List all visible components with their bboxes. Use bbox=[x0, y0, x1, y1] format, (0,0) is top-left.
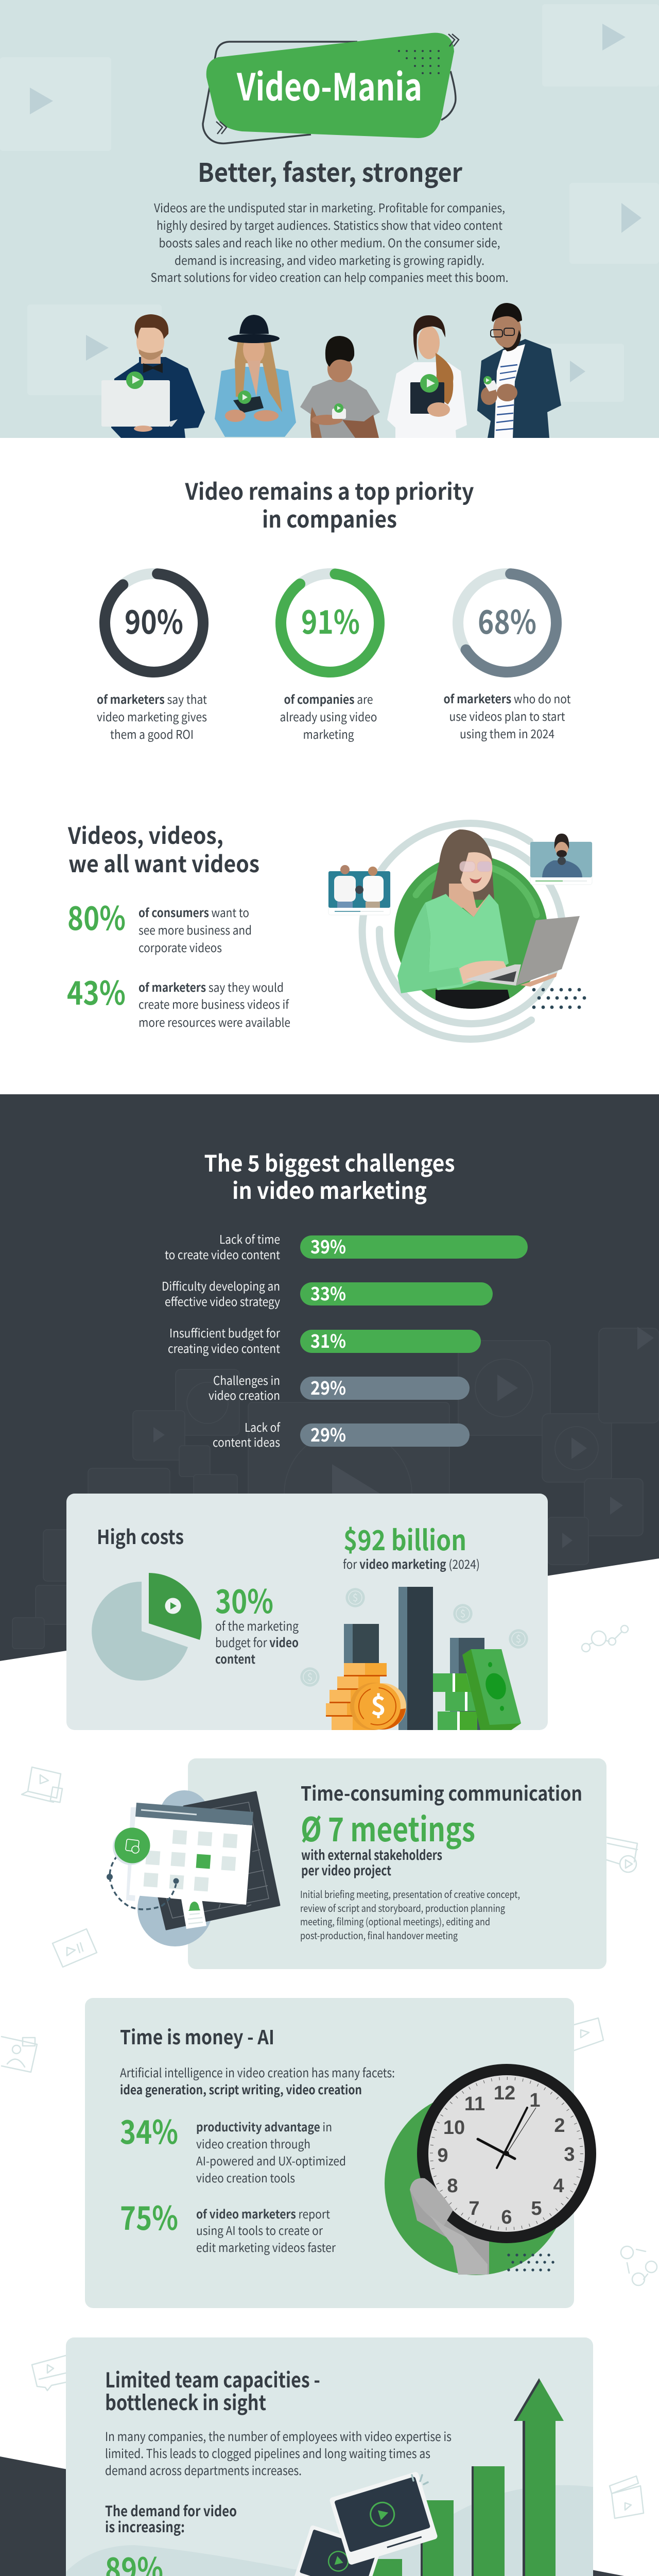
stat: 80%: see more business and bbox=[138, 921, 252, 938]
intro text: highly desired by target audiences. Statistics show that video content bbox=[157, 216, 502, 233]
stat: 43%: of marketers say they would bbox=[138, 978, 284, 995]
bar 29% ideas: Lack of bbox=[245, 1418, 281, 1435]
caption: 68%: of marketers who do not bbox=[444, 689, 571, 707]
icon: clapperboard bbox=[610, 2476, 644, 2518]
caption: 91%: of companies are bbox=[284, 690, 373, 707]
icon: video frame bbox=[574, 2018, 603, 2050]
stat: 80%: 80% bbox=[67, 893, 126, 940]
stat: 43%: 43% bbox=[67, 968, 126, 1014]
heading: top priority bbox=[185, 473, 474, 534]
stat: 30%: 30% bbox=[215, 1576, 273, 1623]
illustration: clock with hand: 8 bbox=[447, 2175, 458, 2197]
heading: top priority: in companies bbox=[262, 501, 397, 534]
intro text: Smart solutions for video creation can help companies meet this boom. bbox=[150, 268, 509, 285]
panel: time-consuming communication bbox=[107, 1758, 606, 1969]
icon: cycle bbox=[621, 2246, 657, 2285]
caption: 90%: video marketing gives bbox=[97, 707, 207, 725]
heading: challenges: in video marketing bbox=[232, 1173, 427, 1206]
heading: videos: Videos, videos, bbox=[67, 818, 223, 851]
stat: 92 billion: for video marketing (2024) bbox=[343, 1554, 480, 1572]
text: meeting list: Initial briefing meeting, presentation of creative concept, bbox=[300, 1887, 520, 1901]
icon: dollar tokens: $ bbox=[516, 1632, 521, 1646]
bar 31%: creating video content bbox=[168, 1339, 280, 1357]
illustration: bars, coins, cash bbox=[326, 1587, 521, 1730]
video card: small bbox=[255, 2569, 330, 2576]
bar 33%: effective video strategy bbox=[165, 1292, 280, 1310]
caption: 68%: use videos plan to start bbox=[449, 707, 565, 724]
heading: time is money: Time is money - AI bbox=[120, 2022, 274, 2050]
person: woman with tablet bbox=[387, 315, 467, 438]
stat: 80%: of consumers want to bbox=[138, 903, 249, 921]
heading: challenges bbox=[204, 1145, 455, 1206]
illustration: clock with hand: 12 bbox=[494, 2082, 515, 2104]
icon: presenter bbox=[2, 2037, 37, 2072]
caption: 90%: of marketers say that bbox=[97, 690, 207, 707]
bar 33%: 33% bbox=[310, 1279, 346, 1306]
intro text: Videos are the undisputed star in marketing. Profitable for companies, bbox=[154, 198, 505, 216]
donut chart: 91% bbox=[276, 569, 384, 677]
stat: 75% bbox=[120, 2193, 336, 2256]
stat: 43%: more resources were available bbox=[138, 1013, 290, 1030]
stat: 75%: of video marketers report bbox=[196, 2205, 330, 2222]
subtitle: Better, faster, stronger bbox=[198, 152, 462, 190]
illustration: clock with hand: 1 bbox=[529, 2090, 541, 2111]
icon: dollar tokens: $ bbox=[307, 1670, 313, 1684]
caption: 68% bbox=[444, 689, 571, 742]
stat: 30%: content bbox=[215, 1649, 255, 1667]
stat: 75%: edit marketing videos faster bbox=[196, 2238, 336, 2256]
title: Video-Mania bbox=[236, 57, 422, 111]
donut chart: 68%: 68% bbox=[478, 597, 536, 643]
text: AI intro: idea generation, script writing, video creation bbox=[120, 2080, 362, 2098]
illustration: calendar bbox=[107, 1790, 280, 1946]
panel: time is money bbox=[85, 1998, 596, 2308]
bar 39%: Lack of time bbox=[219, 1230, 280, 1247]
illustration: clock with hand: 4 bbox=[553, 2175, 564, 2197]
donut chart: 90% bbox=[101, 570, 206, 675]
illustration: woman with laptop bbox=[328, 823, 592, 1039]
icon: calendar play bbox=[606, 1837, 637, 1872]
heading: limited team bbox=[105, 2364, 320, 2416]
stat: 34%: AI-powered and UX-optimized bbox=[196, 2151, 346, 2169]
text: AI intro bbox=[120, 2063, 395, 2098]
text: meeting list: review of script and storyboard, production planning bbox=[300, 1901, 505, 1915]
illustration: clock with hand: 5 bbox=[531, 2198, 542, 2219]
stat: 7 meetings: Ø 7 meetings bbox=[301, 1804, 475, 1851]
text: meeting list bbox=[300, 1887, 520, 1942]
caption: 91%: already using video bbox=[280, 707, 377, 725]
heading: top priority: Video remains a top priority bbox=[185, 473, 474, 506]
text: meeting list: post-production, final handover meeting bbox=[300, 1928, 458, 1942]
intro text bbox=[150, 198, 509, 285]
illustration: clock with hand: 6 bbox=[501, 2207, 512, 2228]
caption: 91% bbox=[280, 690, 377, 742]
illustration: bars, coins, cash: $ bbox=[371, 1686, 386, 1723]
heading: limited team: bottleneck in sight bbox=[105, 2386, 266, 2416]
caption: 90% bbox=[97, 690, 207, 742]
subheading: demand bbox=[105, 2500, 237, 2537]
stat: 7 meetings bbox=[301, 1804, 475, 1879]
person: man in blazer bbox=[477, 303, 561, 438]
bar 33% bbox=[162, 1277, 493, 1310]
bar 31%: 31% bbox=[310, 1327, 346, 1353]
badge chevrons bbox=[216, 34, 459, 134]
person: man with laptop bbox=[101, 314, 205, 438]
stat: 80% bbox=[67, 893, 252, 956]
stat: 80%: corporate videos bbox=[138, 938, 222, 956]
icon: laptop play bbox=[22, 1767, 62, 1802]
stat: 34%: productivity advantage in bbox=[196, 2117, 332, 2135]
caption: 68%: using them in 2024 bbox=[460, 724, 554, 742]
video card: large bbox=[329, 2471, 438, 2565]
chart: growth bars with arrow bbox=[267, 2378, 564, 2576]
panel: hero bbox=[0, 0, 659, 438]
text: AI intro: Artificial intelligence in video creation has many facets: bbox=[120, 2063, 395, 2081]
heading: videos bbox=[67, 818, 259, 879]
stat: 43%: create more business videos if bbox=[138, 995, 289, 1012]
bar 39%: to create video content bbox=[165, 1245, 280, 1263]
heading: high costs: High costs bbox=[97, 1521, 184, 1550]
heading: limited team: Limited team capacities - bbox=[105, 2364, 320, 2394]
stat: 34% bbox=[120, 2107, 346, 2186]
stat: 30%: of the marketing bbox=[215, 1616, 299, 1634]
panel: high costs bbox=[66, 1494, 548, 1730]
stat: 34%: 34% bbox=[120, 2107, 178, 2154]
text: limited team: In many companies, the number of employees with video expertise is bbox=[105, 2427, 452, 2445]
bar 29% creation: 29% bbox=[310, 1374, 346, 1400]
icon: dollar tokens bbox=[300, 1588, 528, 1687]
stat: 75%: 75% bbox=[120, 2193, 178, 2240]
illustration: clock with hand bbox=[385, 2064, 596, 2275]
illustration: clock with hand: 3 bbox=[564, 2144, 575, 2165]
illustration: clock with hand: 7 bbox=[469, 2198, 480, 2219]
icon: dollar tokens: $ bbox=[460, 1606, 465, 1620]
bar 31% bbox=[168, 1324, 481, 1357]
heading: communication: Time-consuming communication bbox=[301, 1778, 582, 1806]
stat: 7 meetings: with external stakeholders bbox=[301, 1845, 442, 1864]
stat: 30% bbox=[215, 1576, 299, 1667]
stat: 34%: video creation through bbox=[196, 2134, 310, 2152]
intro text: boosts sales and reach like no other medium. On the consumer side, bbox=[159, 233, 500, 251]
panel: challenges dark background bbox=[0, 1094, 659, 1661]
pie chart bbox=[92, 1573, 202, 1681]
heading: videos: we all want videos bbox=[68, 846, 259, 879]
accents bbox=[250, 2475, 428, 2576]
person: woman in grey sweater bbox=[300, 336, 380, 438]
icon: video card bbox=[53, 1929, 97, 1967]
text: limited team: demand across departments increases. bbox=[105, 2461, 302, 2479]
illustration: clock with hand: 10 bbox=[443, 2117, 465, 2139]
wave background bbox=[66, 2485, 593, 2576]
donut chart: 91%: 91% bbox=[301, 597, 360, 643]
bar 29% ideas: content ideas bbox=[213, 1433, 280, 1450]
donut chart: 90%: 90% bbox=[125, 597, 183, 643]
bar 29% ideas: 29% bbox=[310, 1420, 346, 1447]
badge dots bbox=[398, 50, 440, 74]
donut chart: 68% bbox=[455, 570, 560, 675]
video card: medium bbox=[293, 2525, 381, 2576]
subheading: demand: is increasing: bbox=[105, 2516, 185, 2537]
bar 39%: 39% bbox=[310, 1232, 346, 1259]
icon: speech video bbox=[32, 2355, 66, 2391]
illustration: clock with hand: 2 bbox=[554, 2115, 565, 2137]
bar 29% creation: Challenges in bbox=[213, 1371, 280, 1388]
stat: 34%: video creation tools bbox=[196, 2168, 295, 2186]
bar 29% creation: video creation bbox=[209, 1386, 280, 1403]
illustration: clock with hand: 9 bbox=[437, 2145, 448, 2166]
person: woman in hat bbox=[215, 315, 296, 437]
title badge green bbox=[206, 33, 454, 138]
icon: network bbox=[582, 1625, 628, 1652]
caption: 91%: marketing bbox=[303, 725, 354, 742]
subheading: demand: The demand for video bbox=[105, 2500, 237, 2521]
text: limited team bbox=[105, 2427, 452, 2479]
icon: dollar tokens: $ bbox=[353, 1590, 358, 1604]
stat: 43% bbox=[67, 968, 290, 1030]
bar 33%: Difficulty developing an bbox=[162, 1277, 280, 1294]
background: lower dark diagonal bbox=[0, 2456, 659, 2576]
stat: 7 meetings: per video project bbox=[301, 1860, 391, 1879]
heading: challenges: The 5 biggest challenges bbox=[204, 1145, 455, 1178]
bar 29% creation bbox=[209, 1371, 470, 1403]
stat: 30%: budget for video bbox=[215, 1633, 299, 1651]
bar 31%: Insufficient budget for bbox=[169, 1324, 280, 1341]
illustration: clock with hand: 11 bbox=[464, 2093, 485, 2115]
intro text: demand is increasing, and video marketing is growing rapidly. bbox=[175, 251, 484, 268]
stat: 75%: using AI tools to create or bbox=[196, 2221, 323, 2239]
caption: 90%: them a good ROI bbox=[110, 725, 194, 742]
bar 29% ideas bbox=[213, 1418, 470, 1450]
bar 39% bbox=[165, 1230, 528, 1263]
title badge outline bbox=[203, 42, 456, 143]
bar chart: challenges bbox=[162, 1230, 528, 1450]
text: limited team: limited. This leads to clogged pipelines and long waiting times as bbox=[105, 2444, 430, 2462]
panel: limited team capacities bbox=[66, 2337, 593, 2576]
stat: 92 billion: $92 billion bbox=[343, 1518, 466, 1558]
text: meeting list: meeting, filming (optional meetings), editing and bbox=[300, 1914, 490, 1928]
